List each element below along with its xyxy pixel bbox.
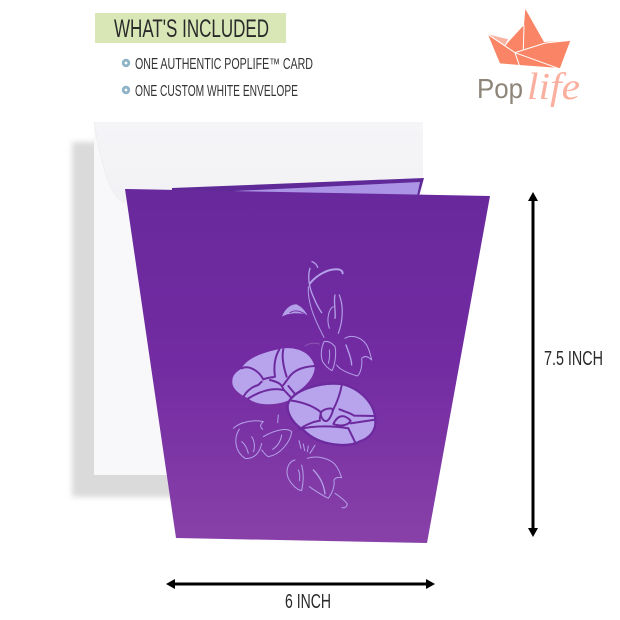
upper vine and bud [282, 262, 372, 376]
label: width: 6 INCH [285, 591, 331, 613]
icon: origami boat [488, 9, 570, 69]
envelope flap [94, 122, 423, 203]
icon: bullet one [123, 60, 129, 66]
bud leaves [305, 336, 372, 376]
icon: bullet two [123, 87, 129, 93]
flowers and lower leaves [232, 348, 375, 508]
envelope [94, 122, 423, 475]
text: card item: ONE AUTHENTIC POPLIFE™ CARD [135, 56, 313, 73]
small leaf [282, 304, 307, 317]
arrow: width dimension [166, 579, 435, 589]
card: inner lavender [235, 182, 420, 196]
card: back panel [172, 178, 424, 196]
text: wordmark Pop: Pop [477, 73, 523, 104]
text: wordmark life: life [527, 66, 580, 108]
heading: what's included [95, 13, 286, 43]
heading: what's included: WHAT'S INCLUDED [114, 15, 269, 43]
envelope shadow [72, 142, 180, 497]
vine tendrils [308, 262, 343, 337]
text: envelope item: ONE CUSTOM WHITE ENVELOPE [135, 83, 298, 100]
lower leaves [233, 415, 347, 508]
arrow: height dimension [528, 192, 538, 537]
card: front panel [125, 189, 490, 543]
logo: Poplife [477, 9, 580, 108]
list: included items [123, 56, 313, 100]
lower flower [288, 384, 375, 445]
upper flower [232, 348, 315, 404]
artwork: morning glory cutouts [232, 262, 375, 508]
